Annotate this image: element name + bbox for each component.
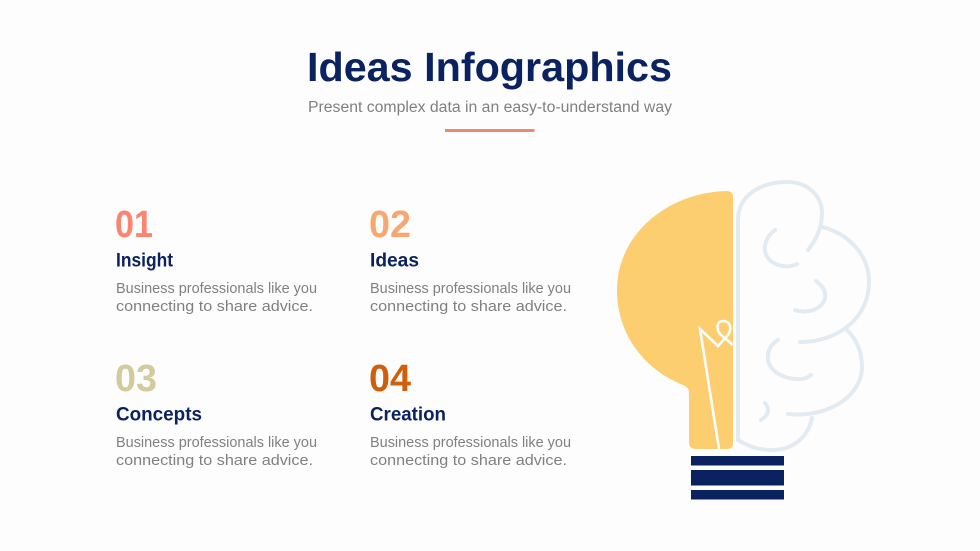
number 01: 01 [115, 204, 153, 246]
heading Insight: Insight [116, 250, 174, 272]
title underline accent [445, 129, 534, 132]
description: Business professionals like you [116, 280, 317, 297]
heading Concepts: Concepts [116, 404, 202, 426]
brain half [738, 182, 869, 450]
number 02: 02 [369, 204, 411, 246]
bulb half [617, 191, 733, 449]
number 03: 03 [115, 358, 157, 400]
bulb base bars [691, 456, 784, 500]
description: connecting to share advice. [116, 452, 313, 469]
number 04: 04 [369, 358, 411, 400]
title: Ideas Infographics [307, 44, 672, 90]
heading Creation: Creation [370, 404, 446, 426]
description: connecting to share advice. [370, 452, 567, 469]
description: connecting to share advice. [370, 298, 567, 315]
description: Business professionals like you [116, 434, 317, 451]
icon: half light bulb half brain [617, 182, 869, 500]
subtitle: Present complex data in an easy-to-understand way [308, 99, 672, 116]
description: Business professionals like you [370, 280, 571, 297]
description: Business professionals like you [370, 434, 571, 451]
filament [700, 321, 733, 449]
item 03: Concepts [115, 358, 317, 469]
item 01: Insight [115, 204, 317, 315]
item 02: Ideas [369, 204, 571, 315]
heading Ideas: Ideas [370, 250, 419, 272]
item 04: Creation [369, 358, 571, 469]
description: connecting to share advice. [116, 298, 313, 315]
